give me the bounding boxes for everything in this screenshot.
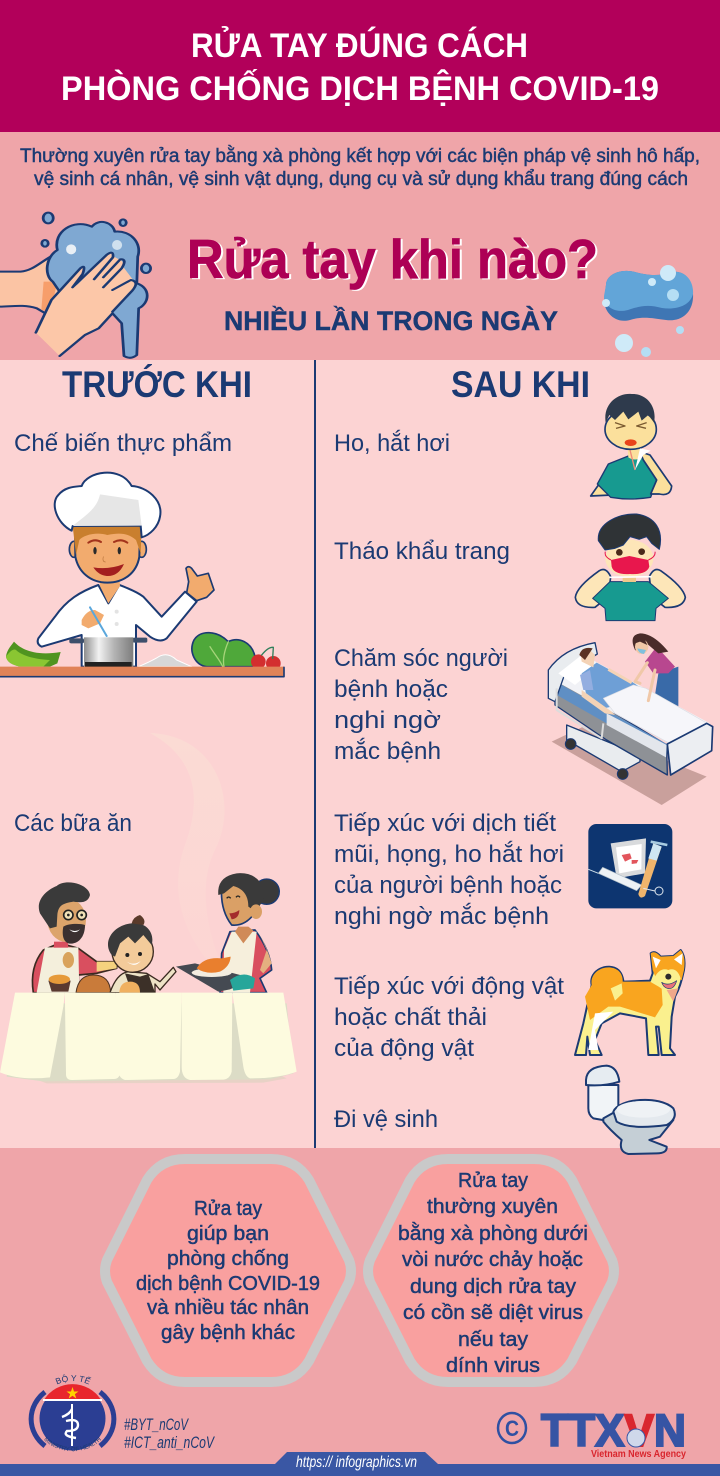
text: contact with secretions: của người bệnh hoặc [334,872,562,899]
panel: hexagon right [368,1159,614,1382]
tray with roast chicken [176,957,255,992]
panel: hexagon left: giúp bạn [187,1223,269,1245]
counter [0,667,284,677]
text: caring for sick people: Chăm sóc người [334,645,508,672]
text: contact with secretions: mũi, họng, ho hắt hơi [334,841,564,868]
nurse [633,633,678,708]
hashtags: #BYT_nCoV [124,1415,189,1434]
table cloth [0,993,297,1083]
text: contact with animals: hoặc chất thải [334,1004,487,1031]
panel: hexagon right: có cồn sẽ diệt virus [403,1302,583,1324]
illustration: hospital bed with nurse [548,633,713,805]
panel: hexagon left: phòng chống [167,1248,289,1270]
illustration: chef [0,473,284,677]
logo: Ministry of Health [28,1374,116,1452]
heading: before: TRƯỚC KHI [62,363,252,405]
illustration: family meal [0,873,297,1083]
footer bar with URL: https:// infographics.vn [296,1454,417,1471]
heading: after: SAU KHI [451,364,590,405]
hashtags: #ICT_anti_nCoV [124,1433,215,1452]
text: contact with secretions [334,810,564,930]
panel: hexagon left: dịch bệnh COVID-19 [136,1273,320,1295]
copyright symbol: C [505,1416,519,1441]
tomatoes [251,647,281,671]
text: contact with animals [334,973,564,1062]
intro text: Thường xuyên rửa tay bằng xà phòng kết hợp với các biện pháp vệ sinh hô hấp, [20,145,700,167]
bread [76,975,111,993]
father [32,882,117,993]
panel: hexagon right: bằng xà phòng dưới [398,1222,588,1245]
text: toilet: Đi vệ sinh [334,1106,438,1133]
title line 1: RỬA TAY ĐÚNG CÁCH [191,27,528,65]
cabbage [192,633,255,667]
panel: hexagon left: gây bệnh khác [161,1322,295,1344]
panel: hexagon right: dính virus [446,1355,540,1377]
panel: hexagon left: Rửa tay [194,1198,262,1220]
text: meals: Các bữa ăn [14,810,132,837]
title line 2: PHÒNG CHỐNG DỊCH BỆNH COVID-19 [61,69,659,108]
text: caring for sick people: bệnh hoặc [334,676,448,703]
icon: washing hands with foam [0,213,151,358]
footer bar with URL [0,1452,720,1476]
panel: hexagon right: thường xuyên [427,1196,558,1218]
text: remove mask: Tháo khẩu trang [334,538,510,565]
text: contact with secretions: nghi ngờ mắc bệnh [334,903,549,930]
panel: hexagon right: vòi nước chảy hoặc [402,1249,583,1271]
text: cough sneeze: Ho, hắt hơi [334,430,450,457]
text: contact with secretions: Tiếp xúc với dịch tiết [334,810,556,837]
intro text: vệ sinh cá nhân, vệ sinh vật dụng, dụng cụ và sử dụng khẩu trang đúng cách [34,169,688,190]
panel: hexagon right: dung dịch rửa tay [410,1276,576,1298]
text: contact with animals: Tiếp xúc với động vật [334,973,564,1000]
hashtags [124,1415,215,1452]
subheading: many times a day: NHIỀU LẦN TRONG NGÀY [224,305,558,336]
header band with title [0,0,720,132]
text: food preparation: Chế biến thực phẩm [14,430,232,457]
panel: hexagon left [105,1159,351,1382]
icon: coughing boy [591,394,672,499]
bottom band [0,1148,720,1476]
bananas [6,642,61,667]
icon: medical samples [588,824,672,908]
agency name: Vietnam News Agency [591,1449,686,1460]
panel: hexagon right: Rửa tay [458,1170,528,1192]
copyright symbol [498,1413,526,1443]
heading: Rửa tay khi nào?: Rửa tay khi nào? [189,229,600,291]
logo: TTXVN: TTXVN [541,1405,686,1456]
mother [218,873,279,993]
panel: hexagon right: nếu tay [458,1329,528,1351]
intro text [20,145,700,190]
icon: toilet [586,1066,675,1154]
icon: boy removing mask [575,514,685,621]
text: caring for sick people [334,645,508,765]
icon: dog [575,950,685,1055]
icon: sponge and bubbles [602,265,693,357]
text: caring for sick people: mắc bệnh [334,738,441,765]
blanket [603,685,708,743]
boy [108,915,176,993]
text: caring for sick people: nghi ngờ [334,707,441,734]
text: contact with animals: của động vật [334,1035,474,1062]
illustration: steam [150,733,235,990]
bed frame [548,643,710,775]
patient [579,648,647,715]
logo text top: BỘ Y TẾ [55,1374,92,1384]
heading: Rửa tay khi nào?: Rửa tay khi nào? [187,228,598,290]
panel: hexagon left: và nhiều tác nhân [147,1297,309,1319]
pot [69,637,147,667]
logo text bottom: MINISTRY OF HEALTH [44,1437,101,1452]
